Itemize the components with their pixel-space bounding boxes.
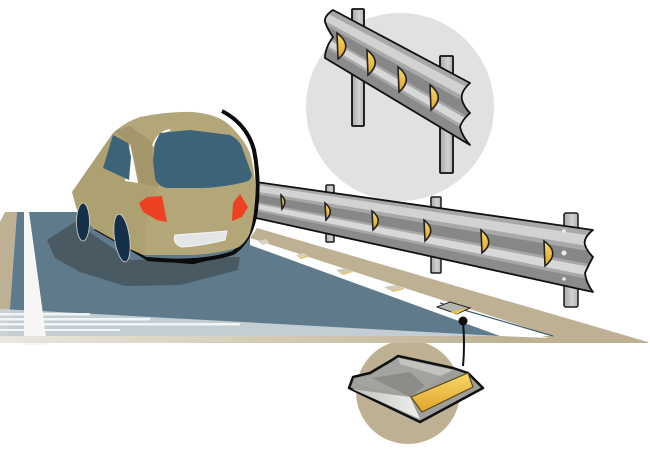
rear window <box>153 130 252 188</box>
number plate <box>174 231 227 247</box>
front wheel <box>76 203 90 241</box>
road scene <box>0 212 648 345</box>
car shadow <box>47 222 240 286</box>
rail outline <box>256 182 593 292</box>
road stud highlighted <box>437 302 470 314</box>
upper rail reflectors <box>337 33 438 110</box>
left tan shoulder <box>0 212 17 336</box>
upper guardrail detail <box>320 5 476 173</box>
stud top <box>354 358 453 397</box>
white edge band <box>248 238 553 336</box>
thin dark edge line <box>440 303 553 336</box>
stud lower facet <box>372 372 425 397</box>
car body <box>72 112 255 255</box>
connector dot <box>458 316 468 326</box>
grey circle behind upper guardrail <box>306 13 494 201</box>
side window <box>103 135 131 180</box>
asphalt surface <box>29 212 500 336</box>
underbody line <box>95 229 233 263</box>
upper rail outline <box>325 10 470 145</box>
left blue strip <box>8 212 24 336</box>
faded stripes <box>0 313 240 331</box>
upper posts <box>352 9 453 173</box>
lower guardrail <box>250 175 600 307</box>
right tail light <box>232 194 248 221</box>
stud front-left face <box>352 389 420 419</box>
small road studs <box>258 239 405 292</box>
car <box>72 111 258 263</box>
rail reflectors <box>281 195 553 266</box>
rear window white highlight <box>153 130 170 146</box>
left tail light <box>139 196 167 222</box>
rear posts <box>326 185 578 307</box>
rail bands <box>256 183 592 291</box>
rear wheel <box>111 213 133 263</box>
bolts <box>562 229 566 281</box>
side window highlight <box>125 143 138 183</box>
tan right shoulder strip <box>250 228 648 342</box>
faded lower road area <box>0 309 500 336</box>
stud yellow lens <box>411 373 473 412</box>
stud body <box>349 356 483 422</box>
tan circle behind reflector detail <box>356 340 460 444</box>
upper rail bands <box>326 11 469 142</box>
black body outline arc <box>147 111 258 261</box>
connector line <box>463 321 464 366</box>
road base strip <box>0 336 648 343</box>
white lane line <box>24 212 47 345</box>
reflector detail <box>349 316 483 422</box>
car side panel <box>72 127 158 255</box>
stud top light facet <box>398 358 453 376</box>
roof pillar <box>115 126 158 187</box>
